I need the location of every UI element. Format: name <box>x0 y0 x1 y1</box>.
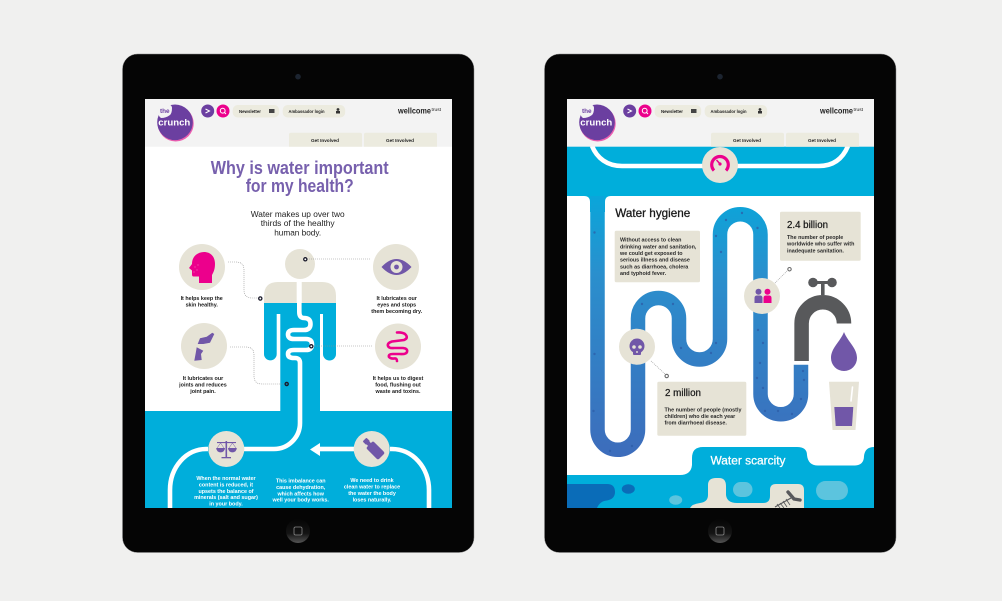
newsletter pill: Newsletter <box>661 109 683 115</box>
callout: 2 million: from diarrhoeal disease. <box>664 421 727 427</box>
caption: dehydration: well your body works. <box>272 498 329 504</box>
caption: digestion: It helps us to digest <box>373 376 424 382</box>
caption: skin: It helps keep the <box>181 296 223 302</box>
callout: 2 million: 2 million <box>665 388 701 399</box>
dotted connector lines <box>228 259 373 384</box>
wellcome trust logo: trust <box>854 107 864 112</box>
white loop left <box>170 449 208 508</box>
caption: drink: clean water to replace <box>344 484 400 490</box>
newsletter pill <box>233 105 279 118</box>
left arm <box>264 303 277 360</box>
caption: eyes: eyes and stops <box>377 303 416 309</box>
callout: 2.4 billion <box>780 212 861 261</box>
caption: minerals: upsets the balance of <box>198 489 254 495</box>
ambassador login pill: Ambassador login <box>710 109 747 115</box>
caption: skin: skin healthy. <box>186 303 218 309</box>
logo: the <box>160 108 170 115</box>
icon: glass of water <box>829 382 859 430</box>
dark water blob <box>567 484 615 508</box>
caption: eyes: them becoming dry. <box>371 309 423 315</box>
callout: without access: serious illness and disease <box>620 258 690 264</box>
callout: 2 million <box>657 382 746 436</box>
home button <box>286 519 310 543</box>
tab 1 <box>711 133 784 147</box>
tab 2 <box>364 133 437 147</box>
icon: scales <box>208 431 244 467</box>
screen <box>567 99 874 508</box>
callout: 2 million: children) who die each year <box>664 414 736 420</box>
caption: eyes: It lubricates our <box>376 296 418 302</box>
tab 2: Get Involved <box>808 138 836 144</box>
tab 2: Get Involved <box>386 138 414 144</box>
left white column <box>567 196 590 475</box>
left tablet <box>122 54 474 552</box>
caption: minerals <box>194 476 258 508</box>
white top curve <box>592 146 848 166</box>
beige land shape <box>690 478 804 508</box>
caption: drink <box>344 478 400 503</box>
caption: skin <box>181 296 223 309</box>
caption: joints <box>178 376 227 395</box>
callout: without access: Without access to clean <box>620 238 681 244</box>
right tablet <box>544 54 896 552</box>
right shoulder <box>302 282 336 303</box>
tab 1: Get Involved <box>733 138 761 144</box>
small dark blob <box>622 484 635 494</box>
camera <box>717 74 723 79</box>
logo <box>157 104 194 142</box>
icon: fish bone <box>775 492 800 508</box>
callout: 2.4 billion: 2.4 billion <box>787 220 828 231</box>
heading: water scarcity: Water scarcity <box>710 456 786 468</box>
home button <box>708 519 732 543</box>
callout: without access: drinking water and sanitation, <box>620 244 697 250</box>
screen <box>145 99 452 508</box>
logo: crunch <box>580 118 612 128</box>
tab 1: Get Involved <box>311 138 339 144</box>
water path through the body <box>244 282 312 449</box>
caption: drink: the water the body <box>348 491 396 497</box>
caption: minerals: When the normal water <box>196 476 257 482</box>
left shoulder <box>264 282 297 303</box>
body figure <box>244 249 336 449</box>
site header <box>567 99 874 147</box>
torso <box>280 303 320 413</box>
icon: face <box>179 244 225 290</box>
caption: eyes <box>371 296 423 315</box>
tablet body <box>122 54 474 552</box>
main white panel <box>605 196 874 476</box>
intro text <box>251 209 345 237</box>
caption: joints: It lubricates our <box>183 376 224 382</box>
title: Why is water important <box>211 158 389 178</box>
caption: joints: joints and reduces <box>178 383 227 389</box>
ambassador login pill <box>283 105 345 118</box>
winding water pipe <box>598 196 801 450</box>
water scarcity section <box>567 447 874 508</box>
arrow <box>310 443 354 456</box>
caption: drink: loses naturally. <box>353 497 392 503</box>
intro text: thirds of the healthy <box>261 218 335 228</box>
newsletter pill <box>655 105 701 118</box>
intro text: human body. <box>274 227 321 237</box>
caption: minerals: in your body. <box>209 502 243 508</box>
icon: bottle <box>354 431 390 467</box>
icon: eye <box>373 244 419 290</box>
newsletter pill: Newsletter <box>239 109 261 115</box>
icon: joint <box>181 323 227 369</box>
share button <box>201 104 214 118</box>
callout: 2 million: The number of people (mostly <box>664 408 741 414</box>
right arm <box>323 303 336 360</box>
intro text: Water makes up over two <box>251 209 345 219</box>
wellcome trust logo: trust <box>432 107 442 112</box>
wellcome trust logo: wellcome <box>397 106 432 116</box>
icon: people <box>744 278 780 314</box>
light water blobs <box>669 481 848 505</box>
title <box>211 158 389 196</box>
caption: dehydration: This imbalance can <box>276 478 326 484</box>
search button <box>216 104 230 118</box>
caption: minerals: content is reduced, it <box>199 482 253 488</box>
callout: without access: and typhoid fever. <box>620 271 667 277</box>
caption: drink: We need to drink <box>350 478 394 484</box>
tablet body <box>544 54 896 552</box>
marker dots <box>259 258 313 386</box>
pipe bubbles <box>592 212 805 452</box>
tab 2 <box>786 133 859 147</box>
camera <box>295 74 301 79</box>
icon: water drop <box>831 332 857 371</box>
callout: 2.4 billion: inadequate sanitation. <box>787 248 844 254</box>
icon: gauge <box>702 147 738 183</box>
caption: digestion: waste and toxins. <box>375 389 421 395</box>
callout: without access: such as diarrhoea, cholera <box>620 264 689 270</box>
blue band <box>567 146 874 212</box>
caption: digestion: food, flushing out <box>375 383 421 389</box>
white loop right <box>390 449 429 508</box>
logo: the <box>582 108 592 115</box>
caption: minerals: minerals (salt and sugar) <box>194 495 258 501</box>
icon: tap <box>802 278 844 361</box>
caption: joints: joint pain. <box>189 389 216 395</box>
caption: dehydration: which affects how <box>276 491 325 497</box>
callout: 2.4 billion: The number of people <box>787 235 843 241</box>
share button <box>623 104 636 118</box>
search button <box>638 104 652 118</box>
tab 1 <box>289 133 362 147</box>
callout: 2.4 billion: worldwide who suffer with <box>786 242 854 248</box>
caption: dehydration <box>272 478 329 504</box>
blue section <box>145 411 452 508</box>
logo <box>579 104 616 142</box>
dotted connector lines <box>651 271 787 374</box>
marker dots <box>665 268 791 378</box>
caption: digestion <box>373 376 424 395</box>
head <box>285 249 315 279</box>
caption: dehydration: cause dehydration, <box>276 485 326 491</box>
ambassador login pill: Ambassador login <box>288 109 325 115</box>
heading: water hygiene: Water hygiene <box>615 206 691 220</box>
callout: without access: we could get exposed to <box>619 251 683 257</box>
site header <box>145 99 452 147</box>
icon: intestine <box>375 324 421 370</box>
wellcome trust logo: wellcome <box>819 106 854 116</box>
callout: without access <box>615 231 700 282</box>
title: for my health? <box>246 176 354 196</box>
icon: skull <box>619 329 655 365</box>
ambassador login pill <box>705 105 767 118</box>
logo: crunch <box>158 118 190 128</box>
